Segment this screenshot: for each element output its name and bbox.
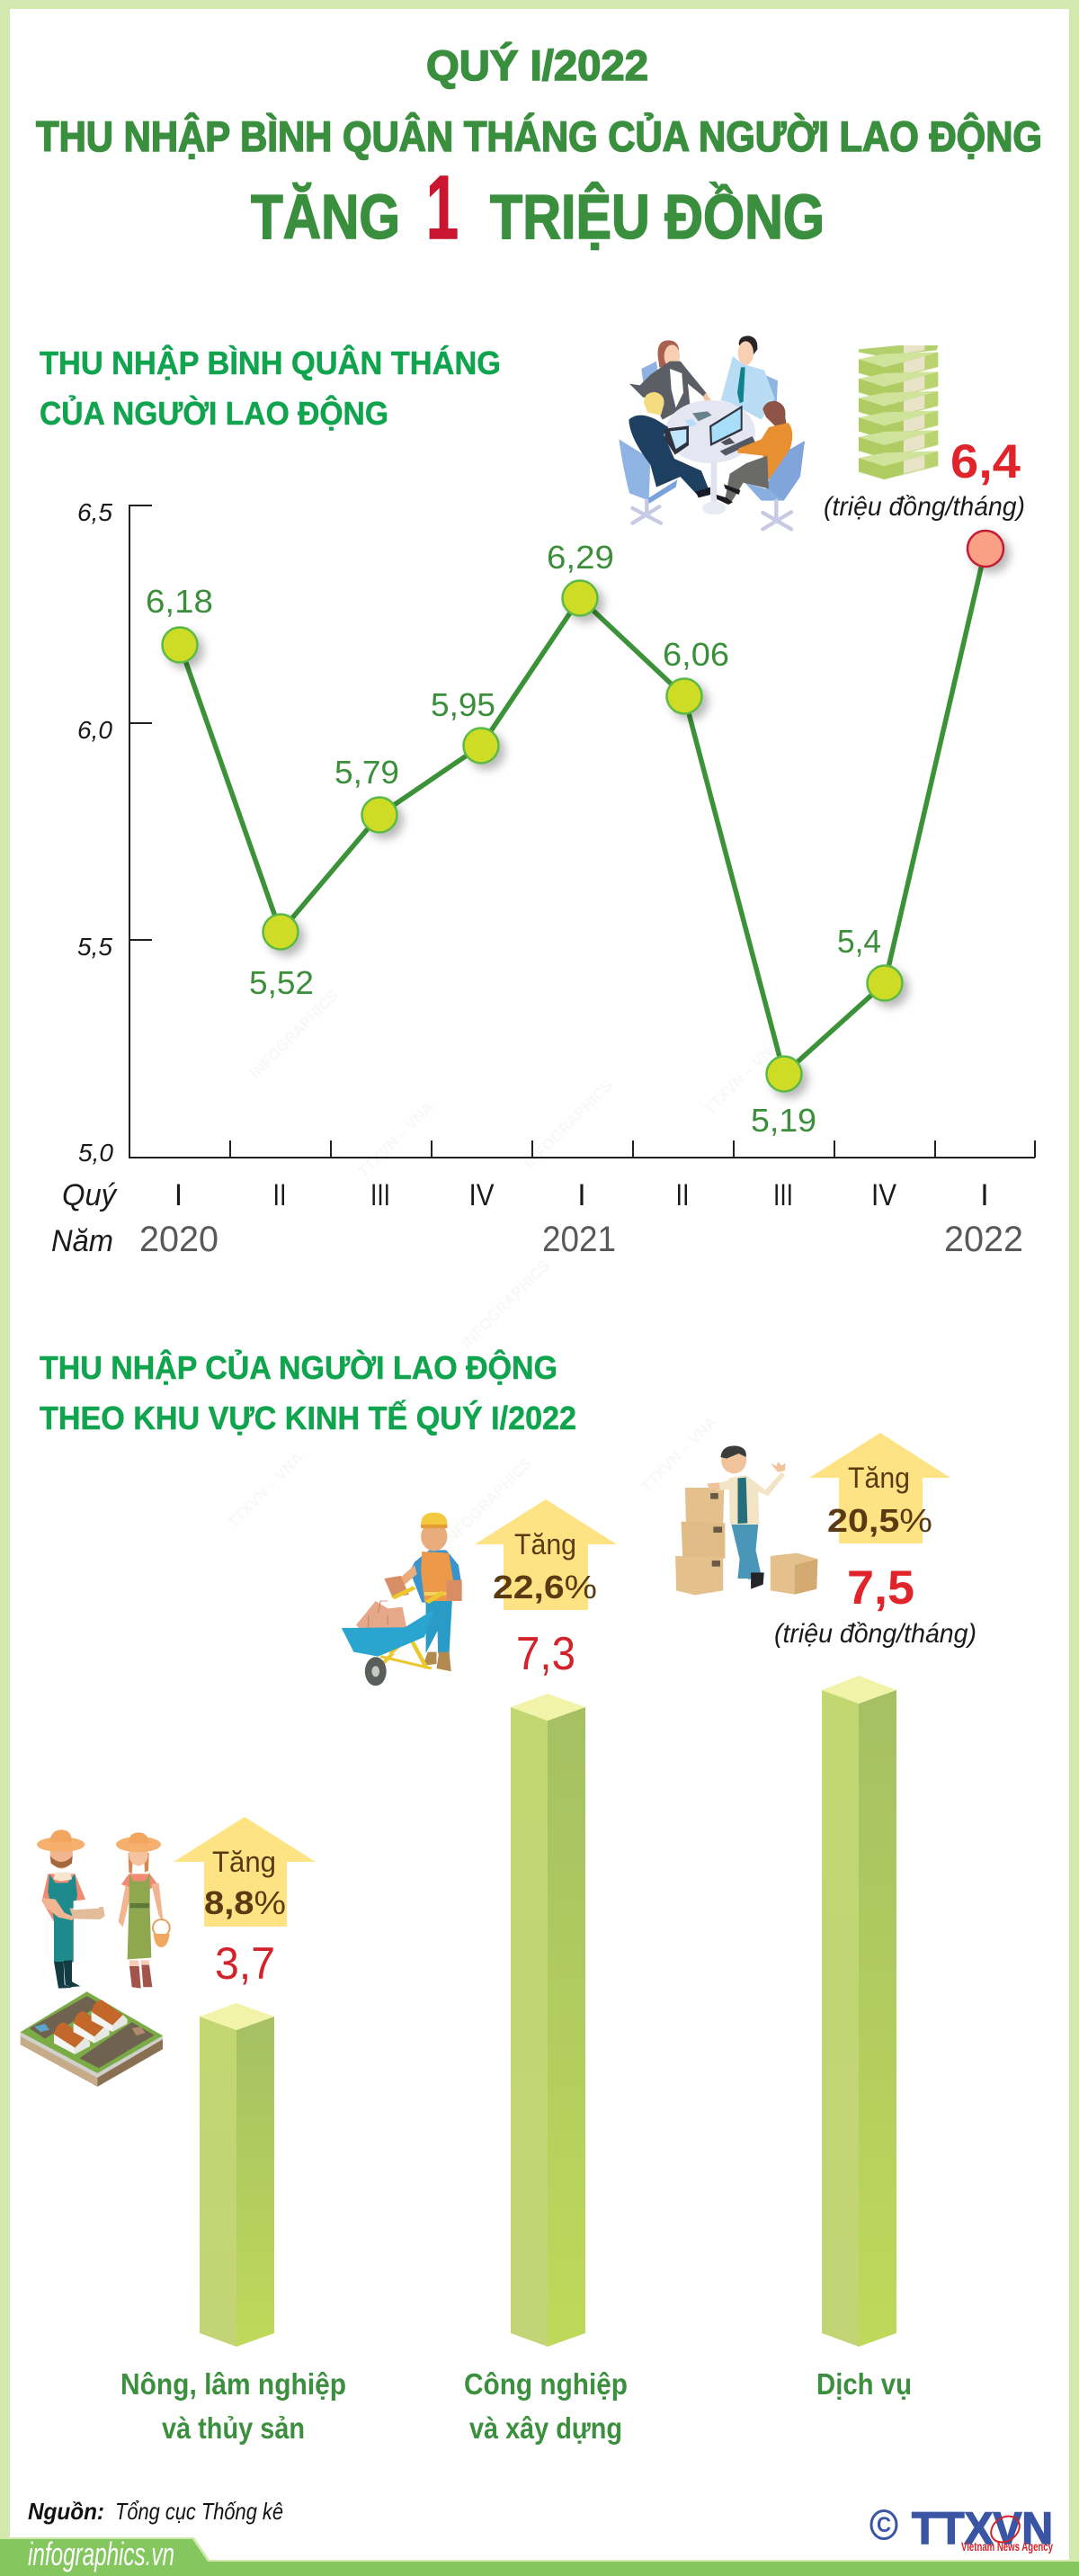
man bbox=[42, 1874, 85, 1963]
arrow: industry up 22.6%: 22,6 % bbox=[493, 1569, 597, 1606]
quarter axis: I bbox=[577, 1178, 586, 1212]
data labels: 5,79 bbox=[334, 754, 399, 791]
watermarks: INFOGRAPHICS bbox=[521, 1077, 616, 1172]
data labels: 6,29 bbox=[547, 539, 614, 576]
y axis labels: 5,0 bbox=[78, 1139, 113, 1167]
icon: construction worker with wheelbarrow bbox=[342, 1513, 462, 1686]
arrow: agriculture up 8.8%: 8,8% bbox=[204, 1884, 286, 1921]
category labels: Nông, lâm nghiệp bbox=[120, 2367, 346, 2401]
title bbox=[36, 41, 1042, 258]
category labels: Công nghiệp bbox=[464, 2367, 628, 2401]
value: industry 7,3: 7,3 bbox=[516, 1628, 575, 1680]
year axis bbox=[51, 1220, 1023, 1259]
line chart bbox=[51, 498, 1035, 1259]
watermarks: TTXVN – VNA bbox=[354, 1098, 437, 1181]
quarter axis: III bbox=[370, 1178, 390, 1212]
quarter axis: I bbox=[174, 1178, 183, 1212]
farm bbox=[21, 2032, 97, 2087]
watermarks: TTXVN – VNA bbox=[638, 1413, 720, 1496]
y axis labels: 6,0 bbox=[77, 716, 112, 744]
data labels: 6,18 bbox=[146, 583, 213, 620]
bar: services bbox=[822, 1676, 896, 2347]
title: TRIỆU ĐỒNG bbox=[490, 181, 825, 252]
heading: income by economic sector: THEO KHU VỰC KINH TẾ QUÝ I/2022 bbox=[40, 1400, 576, 1436]
title: QUÝ I/2022 bbox=[426, 41, 648, 89]
woman bbox=[121, 1874, 159, 1901]
quarter axis: III bbox=[773, 1178, 793, 1212]
category labels: Dịch vụ bbox=[816, 2367, 912, 2401]
icon: business meeting bbox=[619, 335, 805, 529]
y axis labels: 6,5 bbox=[77, 498, 112, 526]
heading: average monthly income: CỦA NGƯỜI LAO ĐỘNG bbox=[40, 394, 388, 432]
watermarks: INFOGRAPHICS bbox=[440, 1454, 535, 1550]
bar: agriculture bbox=[200, 2003, 274, 2347]
data points bbox=[162, 531, 1003, 1092]
quarter axis: Quý bbox=[62, 1178, 118, 1212]
quarter axis: I bbox=[980, 1178, 989, 1212]
source: Nguồn: bbox=[28, 2498, 104, 2525]
arrow: industry up 22.6% bbox=[475, 1499, 617, 1610]
watermarks bbox=[224, 987, 783, 1550]
year axis: 2021 bbox=[542, 1220, 616, 1259]
arrow: agriculture up 8.8% bbox=[174, 1817, 316, 1927]
source bbox=[28, 2498, 283, 2525]
heading: average monthly income bbox=[40, 344, 501, 432]
watermarks: TTXVN – VNA bbox=[224, 1449, 307, 1532]
value: 6,4 million: 6,4 bbox=[950, 435, 1021, 488]
quarter axis: IV bbox=[871, 1178, 896, 1212]
value: services 7,5 bbox=[774, 1561, 976, 1649]
category labels: và xây dựng bbox=[469, 2411, 622, 2445]
value: agriculture 3,7: 3,7 bbox=[215, 1938, 275, 1989]
arrow: services up 20.5%: 20,5 % bbox=[827, 1502, 932, 1539]
title: 1 bbox=[426, 157, 459, 258]
arrow: industry up 22.6%: Tăng bbox=[514, 1528, 576, 1561]
data labels: 5,4 bbox=[837, 923, 881, 960]
year axis: 2020 bbox=[139, 1220, 218, 1259]
icon: man leaning on boxes bbox=[675, 1445, 817, 1595]
data labels: 5,19 bbox=[751, 1102, 816, 1139]
trend line bbox=[180, 549, 985, 1074]
quarter axis: II bbox=[273, 1178, 286, 1212]
source: Tổng cục Thống kê bbox=[115, 2498, 283, 2525]
heading: income by economic sector bbox=[40, 1348, 576, 1436]
icon: stack of money bbox=[859, 345, 938, 479]
watermarks: TTXVN – VNA bbox=[700, 1035, 783, 1118]
title: TĂNG bbox=[251, 182, 400, 252]
watermarks: INFOGRAPHICS bbox=[246, 987, 342, 1082]
heading: average monthly income: THU NHẬP BÌNH QUÂN THÁNG bbox=[40, 344, 501, 381]
arrow: services up 20.5%: Tăng bbox=[848, 1462, 910, 1494]
value: services 7,5: 7,5 bbox=[847, 1561, 914, 1614]
category labels bbox=[120, 2367, 912, 2445]
category labels: và thủy sản bbox=[162, 2411, 305, 2445]
value: 6,4 million: (triệu đồng/tháng) bbox=[824, 492, 1025, 522]
year axis: 2022 bbox=[944, 1220, 1023, 1259]
data labels: 5,52 bbox=[249, 964, 314, 1001]
bar: industry bbox=[511, 1694, 585, 2347]
arrow: services up 20.5% bbox=[809, 1433, 950, 1543]
quarter axis bbox=[62, 1178, 989, 1212]
value: services 7,5: (triệu đồng/tháng) bbox=[774, 1619, 976, 1649]
logo: TTXVN: TTXVN bbox=[912, 2503, 1053, 2554]
quarter axis: IV bbox=[469, 1178, 495, 1212]
data labels bbox=[146, 539, 881, 1139]
watermarks: INFOGRAPHICS bbox=[458, 1257, 553, 1352]
logo: TTXVN: C bbox=[877, 2513, 891, 2537]
heading: income by economic sector: THU NHẬP CỦA NGƯỜI LAO ĐỘNG bbox=[40, 1348, 557, 1386]
y axis labels bbox=[77, 498, 113, 1167]
year axis: Năm bbox=[51, 1224, 113, 1258]
data labels: 6,06 bbox=[663, 636, 729, 673]
website label: infographics.vn bbox=[28, 2536, 174, 2572]
quarter axis: II bbox=[676, 1178, 689, 1212]
y axis labels: 5,5 bbox=[77, 933, 112, 961]
arrow: agriculture up 8.8%: Tăng bbox=[212, 1846, 276, 1878]
icon: farmers bbox=[21, 1829, 170, 2087]
value: 6,4 million bbox=[824, 435, 1025, 522]
data labels: 5,95 bbox=[431, 686, 495, 723]
chart axes bbox=[129, 505, 1035, 1158]
